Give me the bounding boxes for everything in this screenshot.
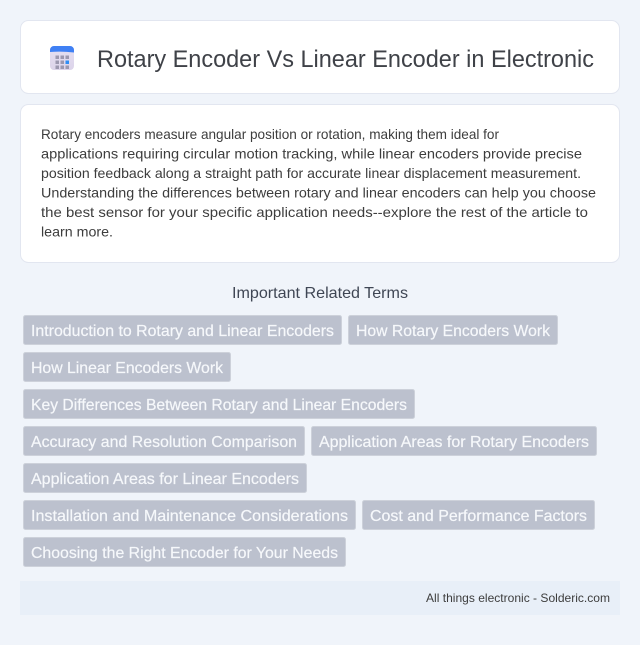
text block: introduction paragraph: the best sensor for your specific application needs--explore the rest of the article to bbox=[41, 204, 588, 220]
heading: important related terms: Important Related Terms bbox=[232, 285, 408, 302]
header panel bbox=[20, 20, 620, 94]
text block: introduction paragraph: position feedback along a straight path for accurate linear displacement measurement. bbox=[41, 165, 581, 181]
tag: introduction: Introduction to Rotary and Linear Encoders bbox=[31, 323, 334, 340]
tag: choosing the right encoder bbox=[24, 538, 346, 566]
tag: installation and maintenance bbox=[24, 500, 356, 530]
tag: choosing the right encoder: Choosing the Right Encoder for Your Needs bbox=[31, 545, 338, 562]
tag: accuracy and resolution bbox=[24, 426, 304, 456]
text block: introduction paragraph: learn more. bbox=[41, 224, 113, 240]
tag: key differences bbox=[24, 390, 414, 418]
tag: how rotary encoders work: How Rotary Encoders Work bbox=[356, 323, 551, 340]
tag: application areas linear: Application Areas for Linear Encoders bbox=[31, 471, 299, 488]
text block: introduction paragraph: Understanding the differences between rotary and linear encoders can help you choose bbox=[41, 184, 596, 200]
tag: how linear encoders work: How Linear Encoders Work bbox=[31, 360, 224, 377]
panel: introduction bbox=[20, 104, 620, 262]
icon: calendar grid bbox=[50, 46, 74, 70]
text block: introduction paragraph: applications requiring circular motion tracking, while linear encoders provide precise bbox=[41, 146, 582, 162]
tag: accuracy and resolution: Accuracy and Resolution Comparison bbox=[31, 434, 297, 451]
tag: application areas linear bbox=[24, 464, 306, 492]
tag: how rotary encoders work bbox=[348, 316, 558, 344]
tag: application areas rotary bbox=[312, 426, 596, 456]
footer credit: All things electronic - Solderic.com bbox=[426, 591, 610, 605]
tag: introduction bbox=[24, 316, 342, 344]
title: Rotary Encoder Vs Linear Encoder in Electronic bbox=[97, 46, 594, 73]
tag: how linear encoders work bbox=[24, 352, 230, 382]
tag: cost and performance: Cost and Performance Factors bbox=[370, 508, 587, 525]
tag: cost and performance bbox=[362, 500, 594, 530]
footer bar bbox=[20, 581, 620, 615]
tag: key differences: Key Differences Between Rotary and Linear Encoders bbox=[31, 397, 407, 414]
text block: introduction paragraph: Rotary encoders measure angular position or rotation, making them ideal for bbox=[41, 126, 499, 142]
tag list bbox=[24, 316, 596, 566]
tag: application areas rotary: Application Areas for Rotary Encoders bbox=[319, 434, 589, 451]
text block: introduction paragraph bbox=[41, 126, 596, 240]
tag: installation and maintenance: Installation and Maintenance Considerations bbox=[31, 508, 348, 525]
